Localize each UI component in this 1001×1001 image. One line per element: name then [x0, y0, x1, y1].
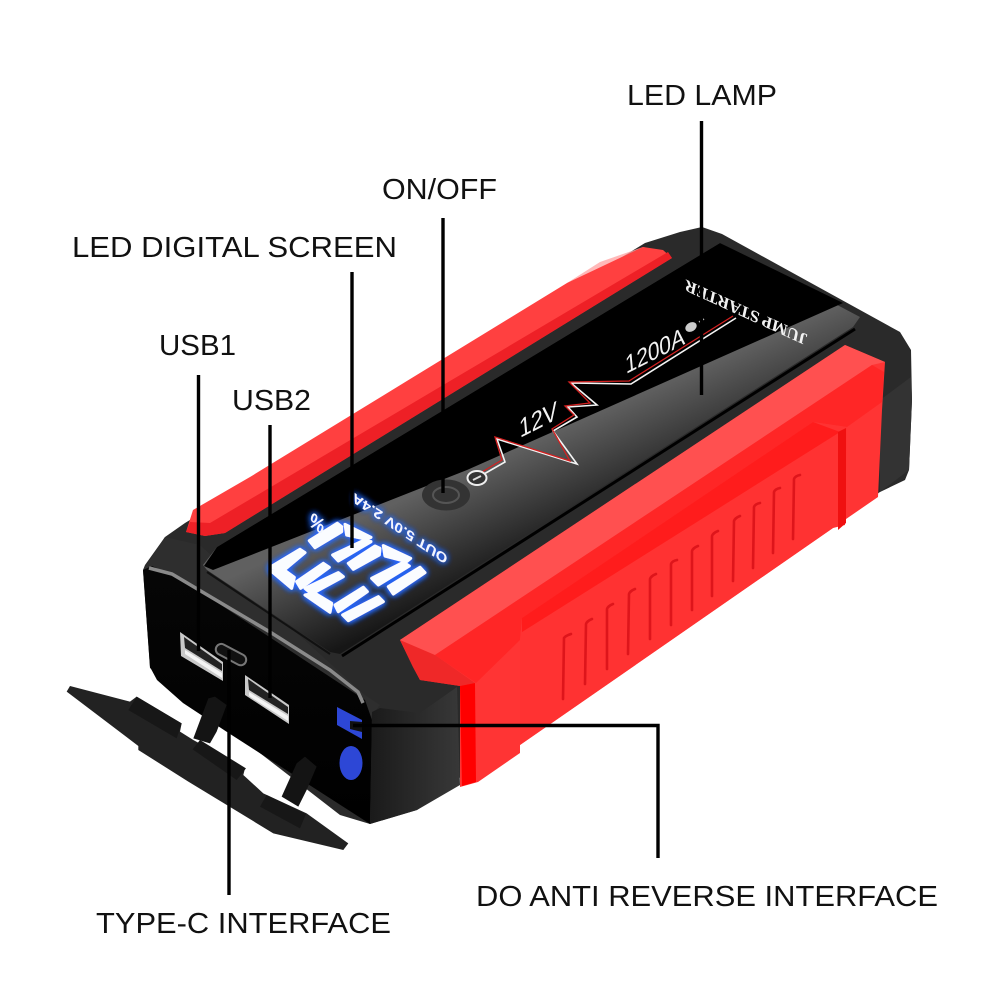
front bevel	[143, 537, 380, 720]
top control panel	[203, 243, 860, 656]
display segments	[270, 523, 425, 621]
line: anti reverse interface	[353, 726, 658, 858]
lit top face of bumper	[400, 345, 885, 655]
12V label: 12V	[518, 396, 559, 444]
line: LED digital screen	[350, 272, 354, 548]
black gloss area	[204, 243, 843, 570]
bright red corner strip	[460, 683, 476, 786]
front face	[143, 566, 372, 824]
darker band on bumper	[435, 365, 884, 683]
rear red strip	[186, 247, 672, 536]
label: LED digital screen: LED DIGITAL SCREEN	[72, 232, 397, 264]
grip ribs	[563, 475, 800, 699]
label: on/off: ON/OFF	[382, 174, 497, 206]
cover latch blocks	[128, 697, 306, 828]
line: USB2	[268, 425, 272, 698]
anti-reverse blue port	[337, 707, 362, 739]
line: Type-C	[227, 650, 231, 895]
label: anti reverse interface: DO ANTI REVERSE INTERFACE	[476, 881, 938, 913]
output voltage readout: OUT 5.0V 2.4A	[350, 490, 449, 567]
pink reflection on rear red strip	[567, 247, 655, 292]
percent sign: %	[307, 507, 328, 538]
label: LED lamp: LED LAMP	[627, 80, 777, 112]
right dark end cap	[880, 377, 912, 492]
power button	[422, 480, 470, 510]
1200A label: 1200A	[624, 322, 686, 380]
USB2 port	[245, 675, 289, 724]
label: USB1: USB1	[159, 330, 236, 362]
line: LED lamp	[700, 121, 703, 395]
cover plate	[67, 686, 348, 850]
product lettering	[468, 275, 809, 485]
label: Type-C interface: TYPE-C INTERFACE	[96, 908, 391, 940]
USB1 port	[180, 632, 223, 681]
line: USB1	[197, 375, 200, 651]
left end side facet	[370, 687, 460, 824]
label: USB2: USB2	[232, 385, 311, 417]
jump starter device	[143, 227, 912, 824]
callout lines	[198, 121, 702, 895]
line: on/off	[441, 218, 445, 493]
waveform trace	[482, 316, 736, 474]
LED digital screen	[270, 490, 449, 621]
round blue port	[340, 746, 362, 780]
flip cover	[67, 686, 348, 850]
Type-C port	[214, 642, 248, 667]
cover hinge straps	[193, 697, 317, 807]
labels	[72, 80, 938, 940]
car icon	[684, 319, 704, 334]
recessed grip area	[520, 422, 847, 745]
small power badge	[468, 471, 486, 485]
jump starter brand text: JUMP STARTER	[683, 275, 809, 348]
red side bumper	[400, 345, 885, 787]
device body silhouette	[143, 227, 912, 824]
left facet of bumper	[400, 640, 475, 686]
